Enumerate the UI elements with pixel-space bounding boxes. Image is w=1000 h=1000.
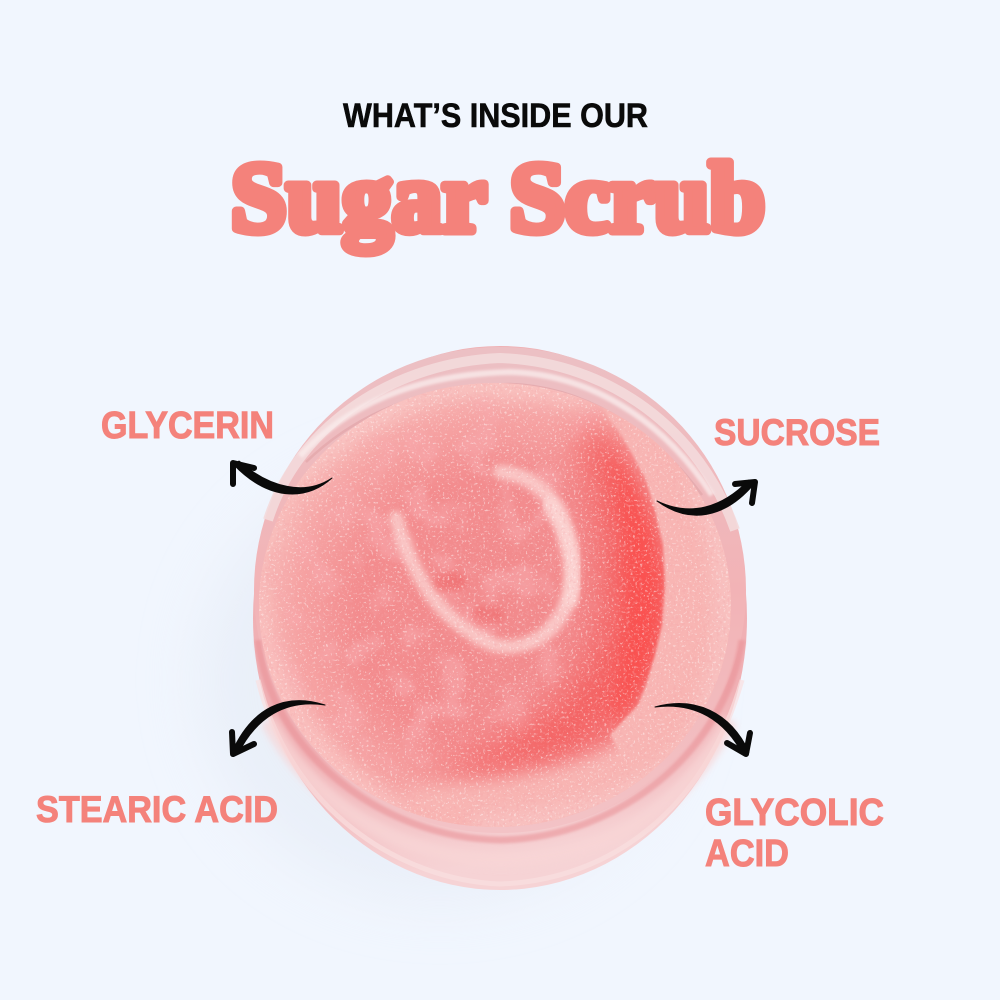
arrow: glycolic acid xyxy=(655,704,750,755)
jar photo xyxy=(252,346,747,890)
label: glycolic acid xyxy=(705,792,884,875)
jar rim xyxy=(254,347,746,833)
soft pale band along bottom xyxy=(412,742,632,820)
jar lower body xyxy=(253,346,747,890)
deep red crescent xyxy=(430,420,668,775)
label: glycolic acid: GLYCOLIC xyxy=(705,792,884,834)
scrub surface xyxy=(259,383,731,827)
label: sucrose: SUCROSE xyxy=(714,412,880,453)
sugar grain xyxy=(341,402,664,774)
arrow: glycerin xyxy=(233,461,332,494)
jar soft shadow xyxy=(200,460,680,900)
label: glycolic acid: ACID xyxy=(705,833,789,875)
pale patches on left and bottom xyxy=(262,637,402,808)
heading: what's inside our: WHAT’S INSIDE OUR xyxy=(343,97,648,135)
label: stearic acid: STEARIC ACID xyxy=(36,789,278,830)
arrow: stearic acid xyxy=(232,701,325,754)
pale right band with sharp edge xyxy=(606,411,716,760)
arrow: sucrose xyxy=(657,480,755,515)
label: glycerin: GLYCERIN xyxy=(101,405,274,447)
white swirl xyxy=(396,472,572,647)
mottled colour xyxy=(316,430,568,742)
dark spots xyxy=(434,572,466,592)
title: sugar scrub: Sugar Scrub xyxy=(231,142,765,253)
